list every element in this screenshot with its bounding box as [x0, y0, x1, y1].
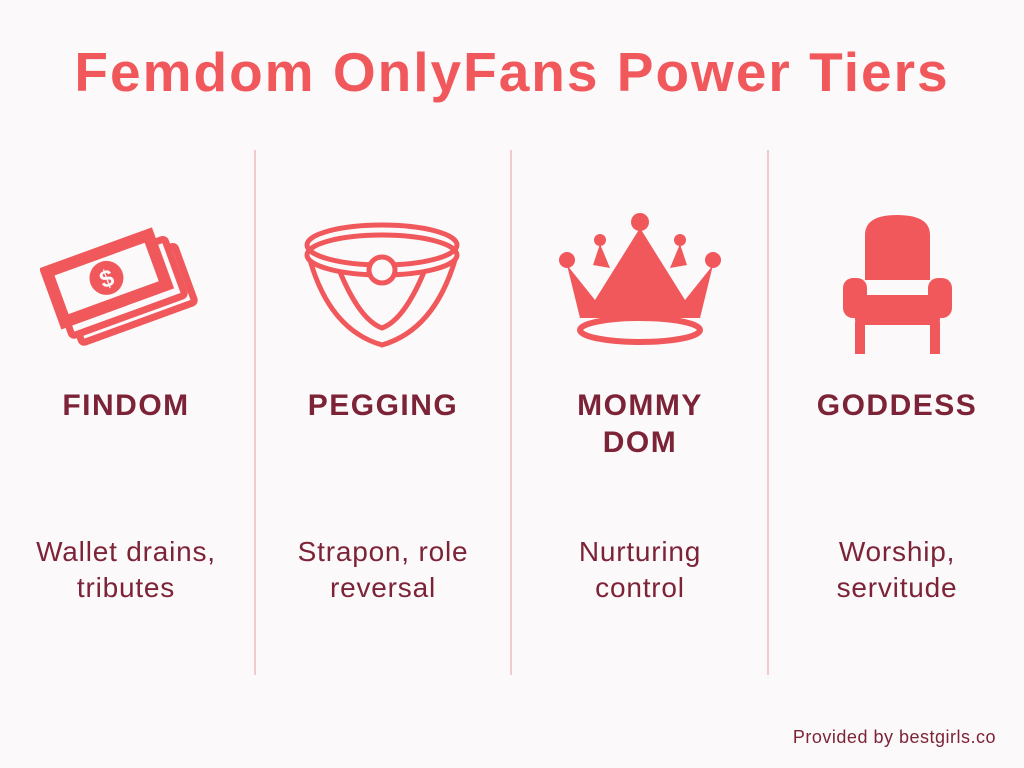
- text: mommy dom: control: [595, 572, 685, 603]
- text: goddess: [837, 536, 957, 603]
- icon: money: [40, 227, 198, 346]
- heading: pegging: PEGGING: [308, 389, 458, 422]
- icon: throne: [843, 215, 952, 354]
- text: findom: [36, 536, 216, 603]
- text: goddess: servitude: [837, 572, 957, 603]
- text: findom: tributes: [77, 572, 175, 603]
- heading: mommy dom: [577, 389, 703, 459]
- title: Femdom OnlyFans Power Tiers: [74, 41, 950, 103]
- icon: crown: [559, 213, 721, 345]
- icon: money: $: [96, 264, 118, 294]
- heading: mommy dom: DOM: [603, 426, 677, 459]
- text: pegging: reversal: [330, 572, 436, 603]
- icon: harness: [304, 222, 460, 348]
- text: mommy dom: [579, 536, 701, 603]
- heading: findom: FINDOM: [62, 389, 190, 422]
- footer: Provided by bestgirls.co: [793, 727, 996, 747]
- heading: mommy dom: MOMMY: [577, 389, 703, 422]
- text: mommy dom: Nurturing: [579, 536, 701, 567]
- text: goddess: Worship,: [839, 536, 955, 567]
- text: pegging: Strapon, role: [298, 536, 468, 567]
- text: findom: Wallet drains,: [36, 536, 216, 567]
- heading: goddess: GODDESS: [817, 389, 977, 422]
- text: pegging: [298, 536, 468, 603]
